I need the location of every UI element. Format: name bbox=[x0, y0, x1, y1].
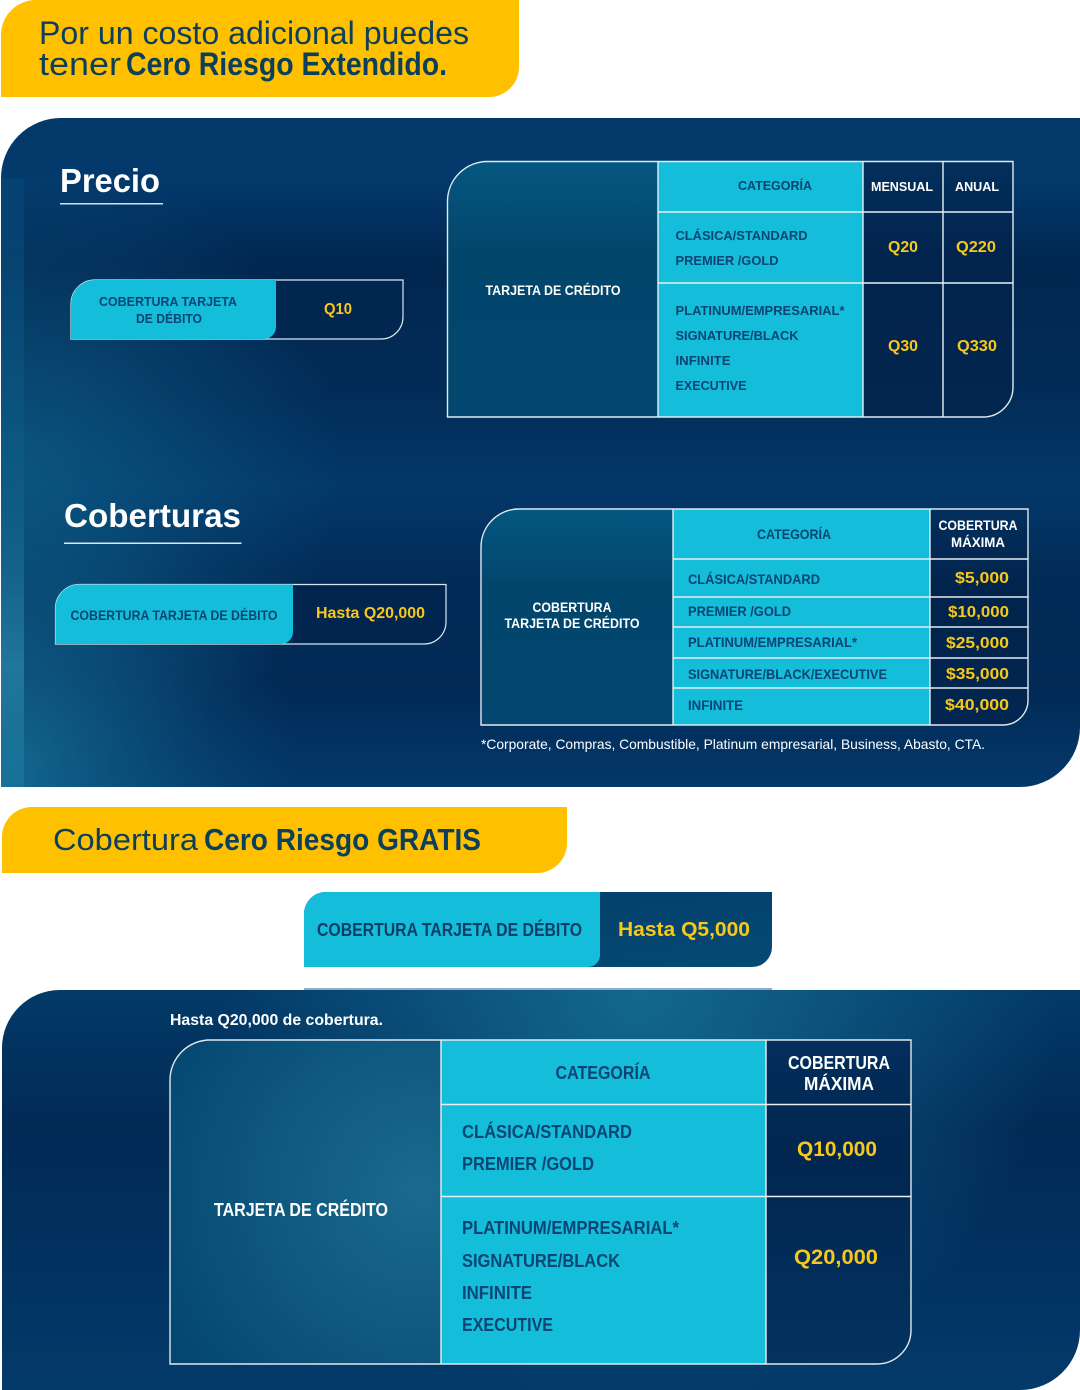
table: cobertura tarjeta de credito: CATEGORÍA bbox=[757, 526, 831, 542]
banner: por un costo adicional bbox=[1, 0, 519, 97]
table: precio tarjeta de credito bbox=[448, 162, 1013, 417]
table: cobertura tarjeta de credito: $40,000 bbox=[945, 697, 1009, 714]
table: precio tarjeta de credito: CATEGORÍA bbox=[738, 178, 813, 193]
heading: coberturas: Coberturas bbox=[64, 497, 241, 534]
table: cobertura tarjeta de credito: COBERTURA bbox=[532, 600, 612, 615]
table: cobertura tarjeta de credito: $5,000 bbox=[955, 570, 1009, 587]
table: cobertura tarjeta de credito: PLATINUM/EMPRESARIAL* bbox=[688, 634, 858, 650]
pill: cobertura tarjeta de debito precio: COBERTURA TARJETA bbox=[99, 294, 238, 309]
banner: cobertura cero riesgo gratis: Cobertura bbox=[53, 822, 199, 857]
table: cobertura tarjeta de credito: TARJETA DE CRÉDITO bbox=[504, 616, 640, 631]
table: precio tarjeta de credito: EXECUTIVE bbox=[676, 378, 747, 393]
table: precio tarjeta de credito: INFINITE bbox=[676, 353, 731, 368]
table: precio tarjeta de credito: TARJETA DE CRÉDITO bbox=[486, 283, 620, 298]
table: cobertura maxima: CLÁSICA/STANDARD bbox=[462, 1121, 632, 1142]
table: cobertura tarjeta de credito bbox=[481, 509, 1028, 725]
table: precio tarjeta de credito: MENSUAL bbox=[871, 179, 933, 194]
pill: cobertura tarjeta de debito precio: DE DÉBITO bbox=[136, 311, 202, 326]
pill: cobertura tarjeta de debito hasta q5,000: Hasta Q5,000 bbox=[618, 919, 750, 941]
pill: cobertura tarjeta de debito hasta q5,000: COBERTURA TARJETA DE DÉBITO bbox=[317, 919, 582, 940]
pill: cobertura tarjeta de debito hasta q20,000: COBERTURA TARJETA DE DÉBITO bbox=[70, 607, 278, 623]
table: cobertura tarjeta de credito: CLÁSICA/STANDARD bbox=[688, 571, 820, 587]
table: precio tarjeta de credito: CLÁSICA/STANDARD bbox=[676, 228, 808, 243]
table: cobertura maxima: MÁXIMA bbox=[804, 1073, 874, 1094]
table: cobertura maxima: EXECUTIVE bbox=[462, 1315, 553, 1335]
table: precio tarjeta de credito: Q220 bbox=[956, 239, 996, 256]
table: cobertura maxima: CATEGORÍA bbox=[556, 1062, 650, 1083]
table: precio tarjeta de credito: PREMIER /GOLD bbox=[676, 253, 778, 268]
banner: cobertura cero riesgo gratis: Cero Riesgo GRATIS bbox=[204, 822, 481, 857]
pill: cobertura tarjeta de debito precio bbox=[71, 280, 403, 339]
panel: tarjeta de credito gratis bbox=[2, 988, 1080, 1390]
table: cobertura tarjeta de credito: PREMIER /GOLD bbox=[688, 603, 791, 619]
table: cobertura maxima: PREMIER /GOLD bbox=[462, 1154, 594, 1174]
banner: por un costo adicional: tener bbox=[39, 46, 121, 82]
pill: cobertura tarjeta de debito hasta q5,000 bbox=[304, 892, 772, 967]
footnote: *Corporate, Compras, Combustible, Platinum empresarial, Business, Abasto, CTA. bbox=[481, 736, 985, 752]
banner: por un costo adicional: Cero Riesgo Extendido. bbox=[126, 46, 447, 82]
pill: cobertura tarjeta de debito hasta q20,000: Hasta Q20,000 bbox=[316, 605, 425, 622]
table: cobertura tarjeta de credito: MÁXIMA bbox=[951, 534, 1005, 550]
banner: por un costo adicional: Por un costo adicional puedes bbox=[39, 15, 469, 51]
table: precio tarjeta de credito: Q30 bbox=[888, 338, 918, 355]
table: precio tarjeta de credito: SIGNATURE/BLACK bbox=[676, 328, 799, 343]
subtitle: Hasta Q20,000 de cobertura. bbox=[170, 1012, 383, 1029]
table: cobertura tarjeta de credito: INFINITE bbox=[688, 697, 743, 713]
heading: precio: Precio bbox=[60, 162, 160, 199]
table: precio tarjeta de credito: ANUAL bbox=[955, 179, 999, 194]
table: cobertura maxima: SIGNATURE/BLACK bbox=[462, 1251, 620, 1271]
table: precio tarjeta de credito: Q20 bbox=[888, 239, 918, 256]
table: cobertura tarjeta de credito: $25,000 bbox=[946, 635, 1009, 652]
pill: cobertura tarjeta de debito precio: Q10 bbox=[324, 301, 352, 318]
table: cobertura maxima: TARJETA DE CRÉDITO bbox=[214, 1199, 388, 1220]
table: precio tarjeta de credito: Q330 bbox=[957, 338, 997, 355]
table: cobertura maxima: PLATINUM/EMPRESARIAL* bbox=[462, 1218, 679, 1238]
panel: precio y coberturas bbox=[1, 118, 1080, 787]
banner: cobertura cero riesgo gratis bbox=[2, 807, 567, 873]
table: cobertura tarjeta de credito: SIGNATURE/BLACK/EXECUTIVE bbox=[688, 666, 887, 682]
table: cobertura maxima bbox=[170, 1040, 911, 1364]
table: cobertura tarjeta de credito: COBERTURA bbox=[938, 517, 1018, 533]
table: cobertura maxima: INFINITE bbox=[462, 1283, 532, 1303]
table: cobertura tarjeta de credito: $35,000 bbox=[946, 666, 1009, 683]
table: cobertura tarjeta de credito: $10,000 bbox=[948, 604, 1009, 621]
table: cobertura maxima: Q20,000 bbox=[794, 1246, 878, 1269]
table: cobertura maxima: COBERTURA bbox=[788, 1053, 890, 1073]
table: precio tarjeta de credito: PLATINUM/EMPRESARIAL* bbox=[676, 303, 845, 318]
table: cobertura maxima: Q10,000 bbox=[797, 1138, 877, 1161]
pill: cobertura tarjeta de debito hasta q20,000 bbox=[56, 584, 446, 644]
